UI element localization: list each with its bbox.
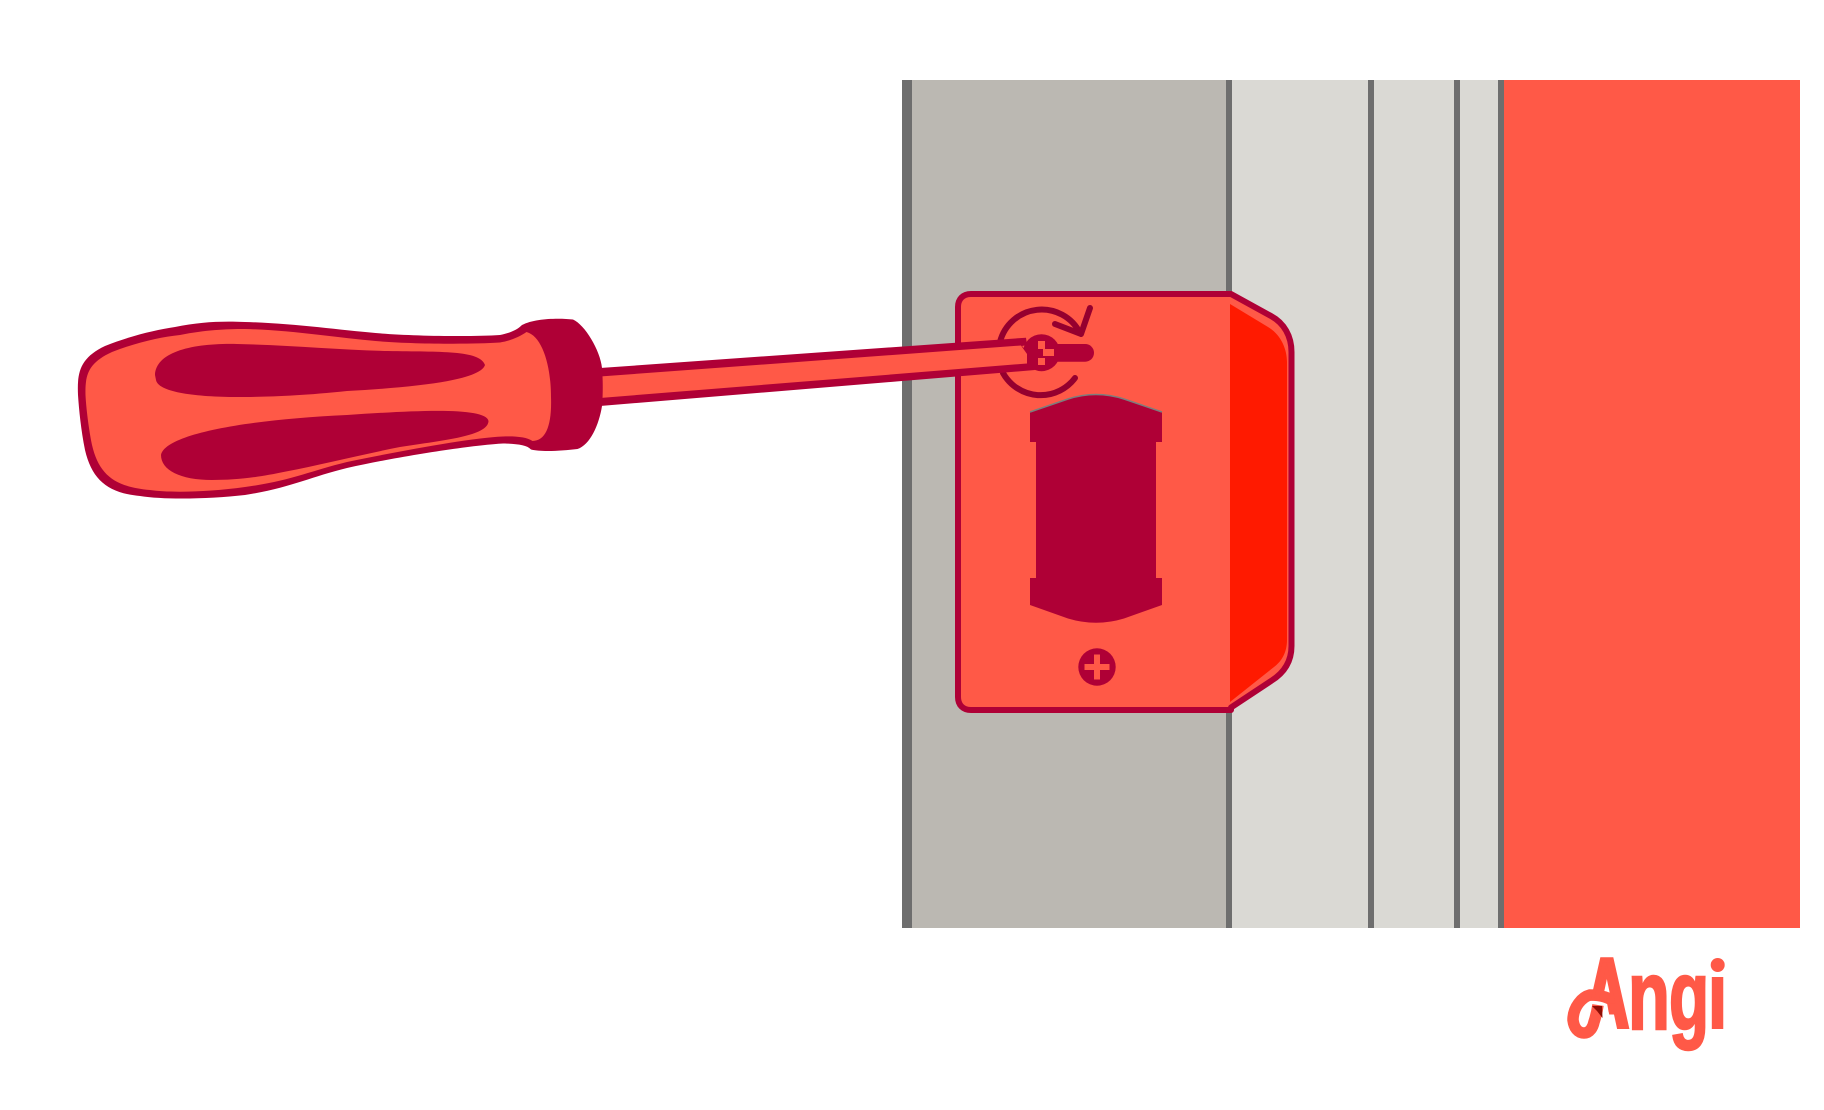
plate outline [958, 294, 1292, 710]
panel: wall stud layers [1227, 80, 1499, 928]
logo wordmark: g [1669, 940, 1709, 1050]
panel: red outer layer [1499, 80, 1800, 928]
panel: drywall layer [902, 80, 1227, 928]
toggle switch [1030, 394, 1162, 623]
plate body [958, 294, 1291, 710]
icon: rotation arrow [1000, 308, 1090, 395]
logo: Angi [1567, 957, 1725, 1052]
screwdriver [78, 319, 1038, 499]
wall cross-section [902, 80, 1800, 928]
handle body [85, 329, 551, 492]
handle outline [78, 319, 603, 499]
logo fold shadow [1592, 1006, 1602, 1018]
logo wordmark [1593, 957, 1724, 1052]
upper grip [155, 344, 485, 397]
logo wordmark: A [1584, 937, 1630, 1052]
switch plate bracket [958, 294, 1292, 710]
red recessed side [1230, 304, 1287, 702]
logo wordmark: n [1628, 940, 1670, 1050]
shaft [600, 338, 1038, 406]
logo wordmark: i [1706, 942, 1729, 1051]
upper screw [1023, 334, 1094, 371]
lower grip [161, 411, 488, 480]
lower screw [1078, 648, 1116, 686]
logo loop [1573, 995, 1616, 1033]
